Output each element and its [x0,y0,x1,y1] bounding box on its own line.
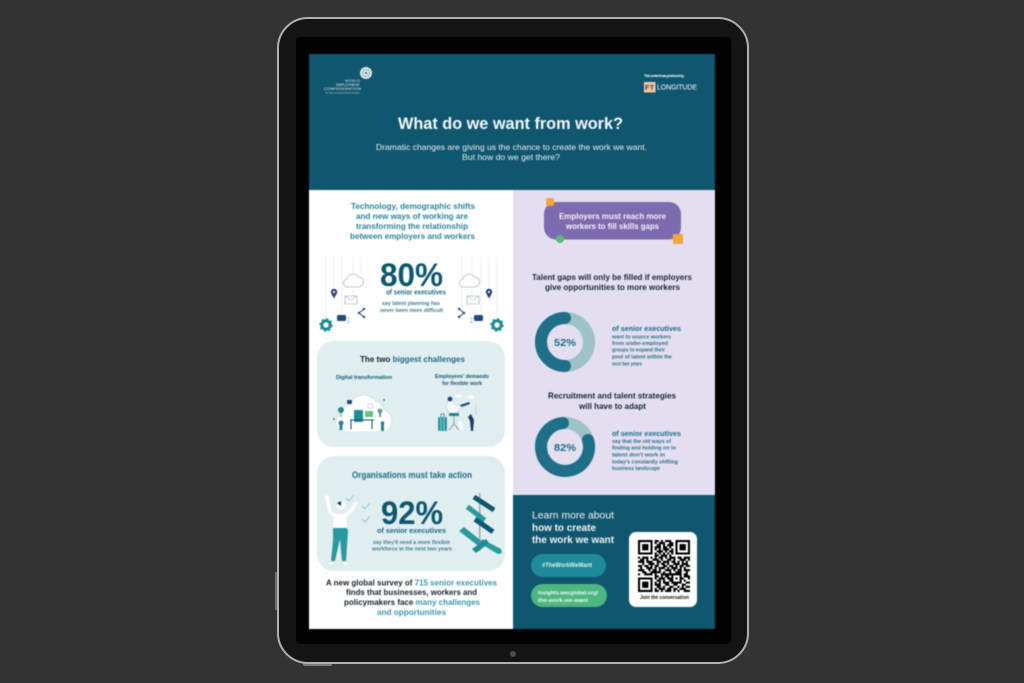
stat: 80%: say talent planning has [382,301,440,307]
challenges heading: The two biggest challenges [360,354,465,364]
illustration: signpost [459,493,502,554]
survey summary: A new global survey of 715 senior executives [326,578,497,588]
heading: recruitment [548,390,676,411]
panel: learn more [513,495,715,629]
heading: talent gaps: give opportunities to more workers [545,282,680,292]
logo: World Employment Confederation: The Voice of Labour Market Enablers [325,92,360,94]
logo: World Employment Confederation: CONFEDERATION [324,86,361,91]
button: hashtag [531,554,606,577]
panel: header [309,54,715,190]
logo: World Employment Confederation [324,67,372,94]
tablet frame [275,18,748,666]
panel: the two biggest challenges [317,341,505,447]
learn more heading: Learn more about [532,510,614,522]
donut chart: 52% [541,318,589,366]
illustration: digital office cloud [333,395,392,432]
stat: 92%: workforce in the next two years [371,546,452,552]
stat text: 82%: of senior executives [612,429,681,438]
learn more heading: the work we want [532,535,615,546]
stat: 92%: of senior executives [377,526,446,535]
survey summary [326,578,497,617]
heading: talent gaps: Talent gaps will only be filled if employers [532,272,692,282]
illustration: celebrating person with check marks [327,495,370,565]
intro heading [350,201,475,241]
stat text: 52%: want to source workers [611,334,671,340]
label: flexible work [435,374,489,387]
stat text: 82%: say that the old ways of [612,439,671,445]
icons: left hanging technology [320,257,365,331]
intro heading: and new ways of working are [356,211,468,221]
stat text: 52%: next two years [612,362,642,368]
logo: FT Longitude: LONGITUDE [657,84,697,92]
logo: FT Longitude [644,74,697,92]
title: What do we want from work? [398,114,623,133]
stat text: 82%: talent don't work in [612,452,666,458]
donut chart: 52%: 52% [554,338,576,349]
panel: organisations must take action [317,456,505,571]
stat text: 52% [611,324,681,368]
panel: left column [309,190,513,629]
stat: 80% [380,257,446,314]
infographic page [309,54,715,629]
callout: employers must reach more workers [544,198,683,244]
illustration: flexible worker with suitcase [438,394,476,431]
heading: recruitment: will have to adapt [578,401,646,411]
learn more heading: how to create [532,523,596,534]
QR code [638,540,690,592]
panel: right column skills [513,190,715,495]
stat: 80%: 80% [380,257,443,293]
button: website [531,584,607,607]
button: website: the-work-we-want [538,598,588,604]
subtitle: But how do we get there? [462,152,560,162]
callout: employers must reach more workers: Employers must reach more [559,212,667,221]
learn more heading [532,510,615,546]
callout: employers must reach more workers: workers to fill skills gaps [565,222,660,231]
logo: FT Longitude: This content was produced by [644,74,684,78]
stat: 92%: 92% [381,495,443,531]
stat: 80%: of senior executives [386,288,446,296]
stat text: 52%: of senior executives [612,324,681,333]
stat: 92%: say they'll need a more flexible [373,540,450,546]
QR caption: Join the conversation [640,595,690,601]
heading: talent gaps [532,272,692,292]
heading: recruitment: Recruitment and talent strategies [548,390,676,400]
stat: 80%: never been more difficult [380,308,443,314]
logo: World Employment Confederation: WORLD [345,79,360,83]
stat text: 52%: groups to expand their [612,348,666,354]
survey summary: and opportunities [377,607,446,617]
stat text: 82% [612,429,681,472]
intro heading: transforming the relationship [356,221,468,231]
label: flexible work: Employees' demands [435,374,489,380]
stat text: 82%: today's constantly shifting [612,460,678,466]
subtitle [376,142,647,162]
stat text: 82%: business landscape [612,466,660,472]
stat text: 82%: finding and holding on to [612,446,677,452]
logo: FT Longitude: FT [645,85,655,92]
donut chart: 82%: 82% [554,443,576,454]
donut chart: 82% [541,423,589,471]
icons: right hanging technology [458,257,503,331]
logo: World Employment Confederation: EMPLOYMENT [336,83,361,87]
label: digital transformation: Digital transformation [336,375,393,381]
intro heading: between employers and workers [350,231,475,241]
stat: 92% [371,495,452,552]
button: website: insights.wecglobal.org/ [538,590,598,596]
intro heading: Technology, demographic shifts [351,201,475,211]
button: hashtag: #TheWorkWeWant [542,563,592,569]
stat text: 52%: from under-employed [612,341,668,347]
survey summary: policymakers face many challenges [344,597,480,607]
survey summary: finds that businesses, workers and [346,587,477,597]
action heading: Organisations must take action [352,470,472,480]
label: flexible work: for flexible work [442,381,483,387]
QR code card [629,532,697,607]
subtitle: Dramatic changes are giving us the chance to create the work we want. [376,142,647,152]
stat text: 52%: pool of talent within the [612,354,672,360]
